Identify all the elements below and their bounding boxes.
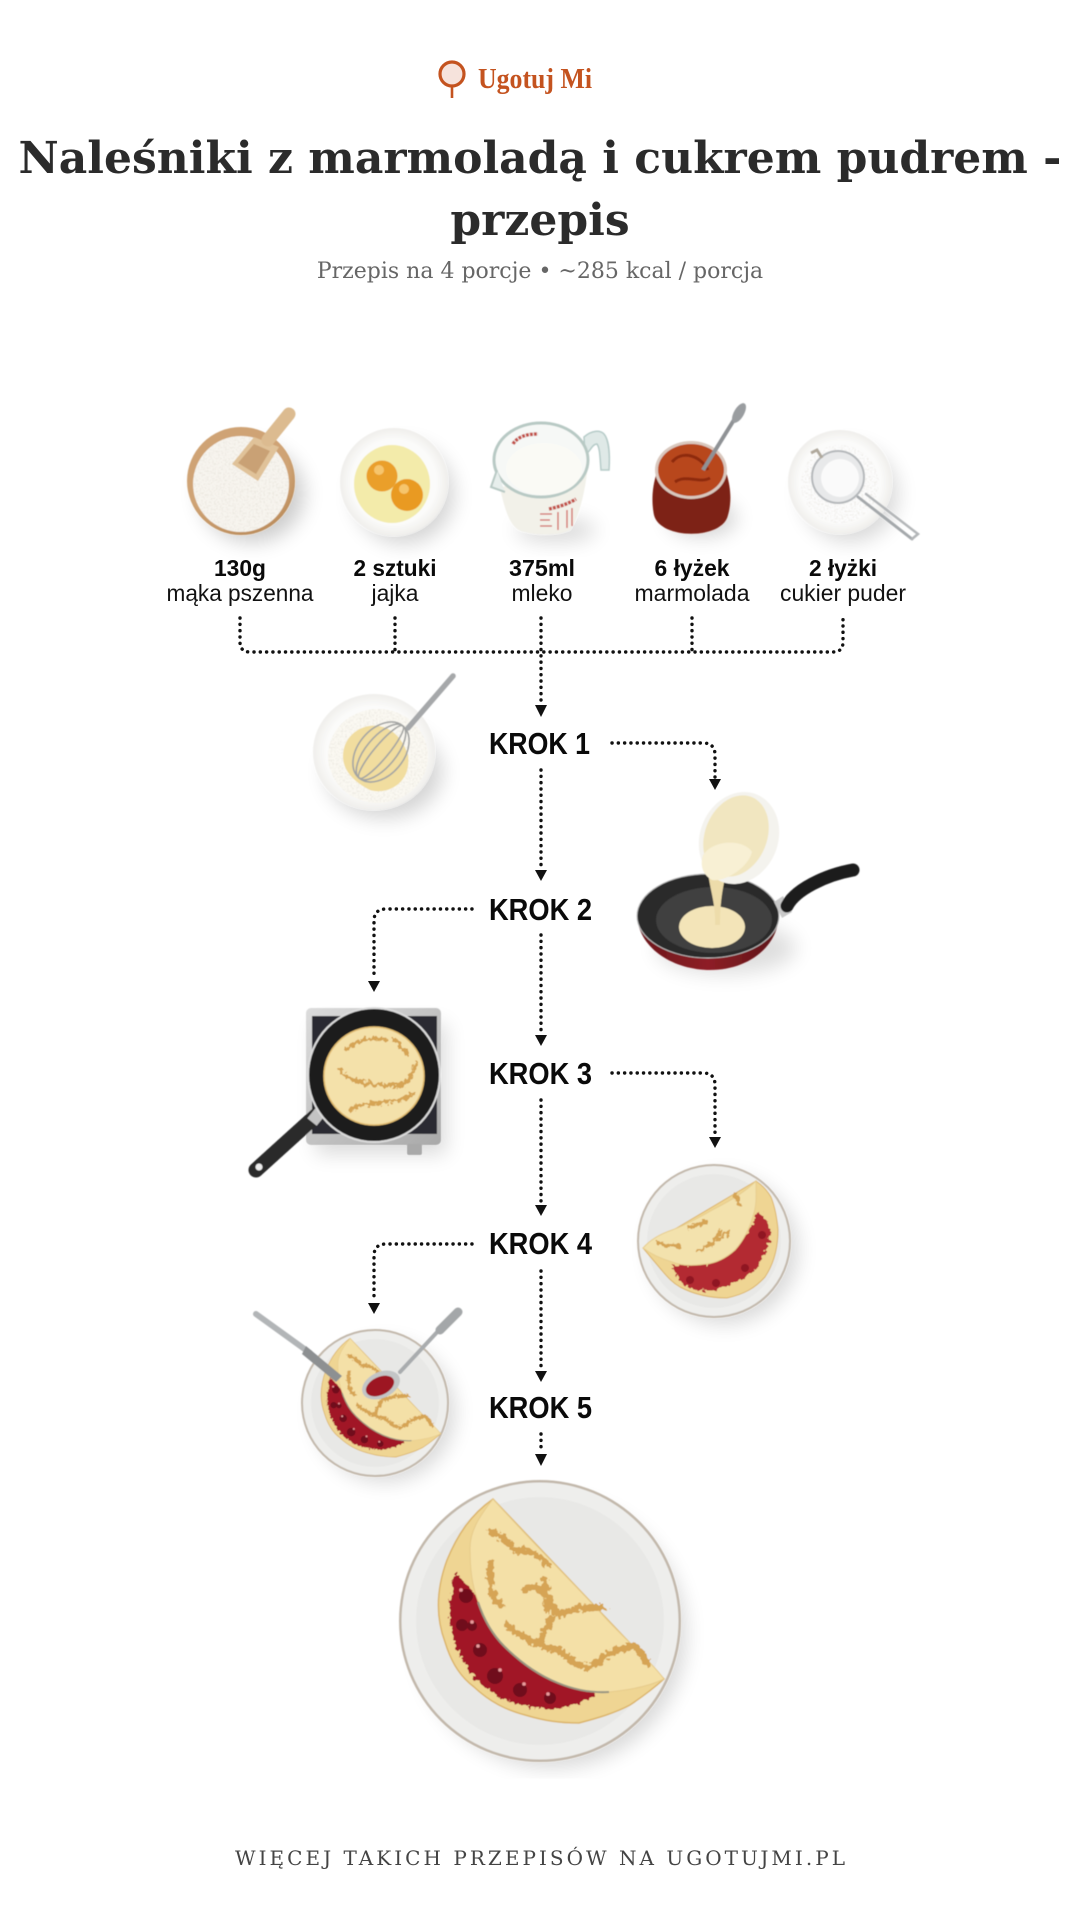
label: jam: marmolada (634, 580, 750, 606)
arrow: step 1 to step 2 (535, 770, 547, 881)
arrow: step 4 to image (368, 1244, 472, 1314)
step 5 image: plate with crepe, knife and spoon (256, 1312, 458, 1482)
title: Naleśniki z marmoladą i cukrem pudrem - (19, 133, 1061, 184)
ingredient: jam jar (652, 401, 749, 536)
label: sugar (780, 555, 906, 606)
label: milk: mleko (512, 580, 572, 606)
final dish: crepe on plate (399, 1480, 686, 1768)
arrow: step 3 to image (612, 1073, 721, 1148)
step 4 image: plate with jam crepe (637, 1164, 798, 1324)
panel: ingredients (166, 401, 918, 606)
footer: WIĘCEJ TAKICH PRZEPISÓW NA UGOTUJMI.PL (235, 1845, 845, 1870)
step 2 image: pouring batter into pan (637, 780, 853, 974)
ingredient: milk jug (491, 423, 609, 542)
step 1 image: whisking bowl (313, 676, 453, 818)
label: eggs: jajka (371, 580, 419, 606)
subtitle: Przepis na 4 porcje • ~285 kcal / porcja (317, 259, 763, 284)
arrow: step 3 to step 4 (535, 1100, 547, 1216)
step 3 label: KROK 3 (489, 1056, 592, 1091)
label: flour: mąka pszenna (166, 580, 314, 606)
icon: spoon logo (440, 62, 464, 98)
crepe folded layer (643, 1181, 756, 1265)
arrow: step 4 to step 5 (535, 1271, 547, 1382)
title (19, 133, 1061, 246)
step 1 label: KROK 1 (489, 726, 590, 761)
logo wordmark: Ugotuj Mi (478, 64, 592, 95)
ingredient: powdered sugar (788, 430, 918, 542)
logo (440, 62, 592, 98)
ingredient: eggs (340, 428, 454, 544)
arrow: step 2 to image (368, 909, 472, 992)
label: eggs: 2 sztuki (354, 555, 436, 581)
label: milk: 375ml (509, 555, 575, 581)
step 3 image: crepe frying on hob (256, 1007, 446, 1170)
arrow: step 1 to image (612, 743, 721, 790)
ingredient: flour (187, 414, 304, 542)
label: flour: 130g (214, 555, 266, 581)
label: flour (166, 555, 314, 606)
step 2 label: KROK 2 (489, 892, 592, 927)
step 5 label: KROK 5 (489, 1390, 592, 1425)
label: sugar: 2 łyżki (809, 555, 877, 581)
jam (672, 1211, 770, 1291)
label: eggs (354, 555, 436, 606)
label: jam (634, 555, 750, 606)
label: sugar: cukier puder (780, 580, 906, 606)
arrow: step 2 to step 3 (535, 935, 547, 1046)
title: przepis (450, 195, 630, 246)
arrow: ingredients merge into step 1 (240, 618, 843, 717)
label: jam: 6 łyżek (654, 555, 730, 581)
label: milk (509, 555, 575, 606)
arrow: step 5 to final plate (535, 1434, 547, 1466)
crepe bottom layer (643, 1181, 778, 1298)
step 4 label: KROK 4 (489, 1226, 593, 1261)
